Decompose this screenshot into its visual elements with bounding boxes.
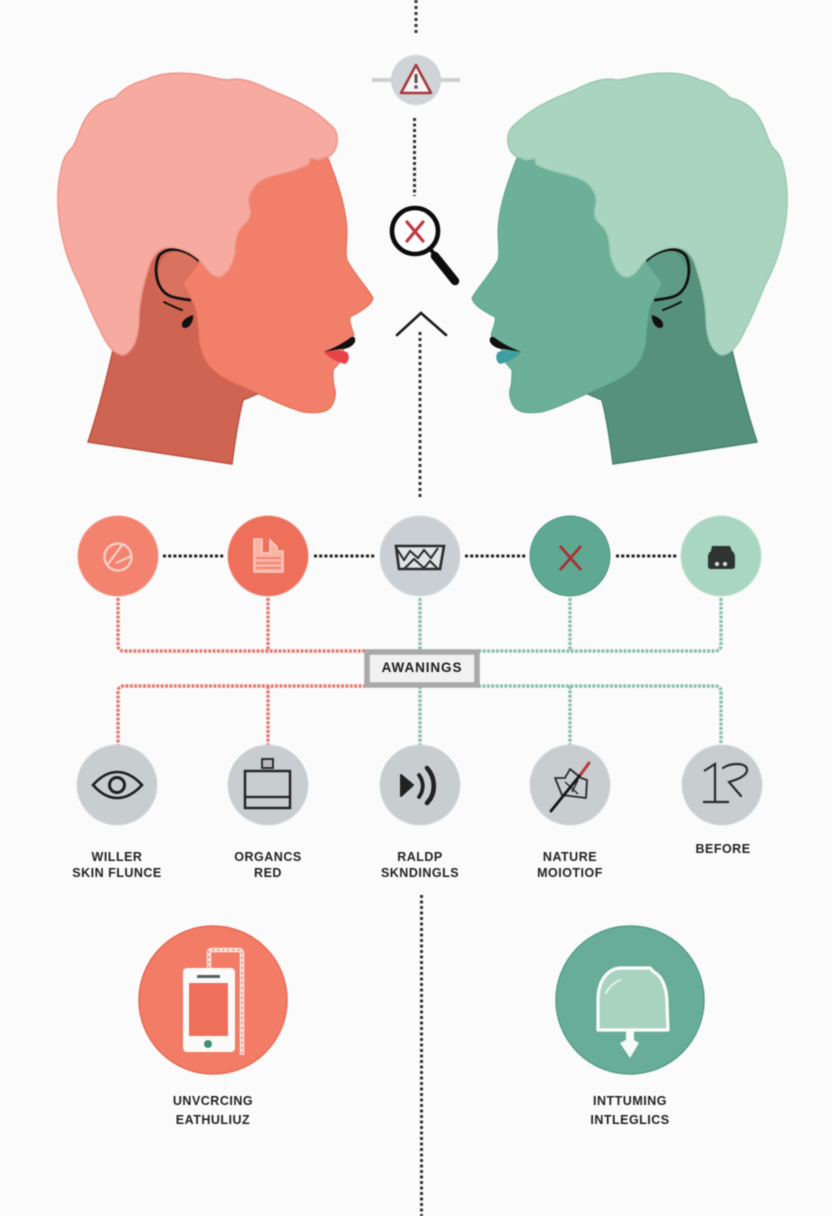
- bottom left label: UNVCRCING: [173, 1094, 253, 1108]
- label: second: ORGANCS: [234, 850, 302, 864]
- label: second: RED: [254, 866, 282, 880]
- bottom left label: EATHULIUZ: [176, 1113, 250, 1127]
- label: fourth: NATURE: [543, 850, 597, 864]
- icon labels: [72, 842, 751, 880]
- bottom row icons: [77, 745, 762, 825]
- central dotted line: lower: [418, 332, 422, 498]
- left neck: [88, 244, 262, 464]
- central label box: [367, 652, 477, 685]
- label: first: WILLER: [92, 850, 142, 864]
- left head: coral profile: [58, 73, 373, 464]
- icon circle: grey landscape: [380, 516, 460, 596]
- icon circle: glyph mark: [682, 745, 762, 825]
- bottom right label: INTTUMING: [593, 1094, 667, 1108]
- icon circle: eye: [77, 745, 157, 825]
- icon: magnifier with red cross: [392, 208, 455, 281]
- label: fifth: BEFORE: [695, 842, 751, 856]
- bottom right icon: capsule: [556, 926, 704, 1074]
- top row icons: [78, 516, 761, 596]
- central dotted line: top: [414, 0, 418, 33]
- label: fourth: MOIOTIOF: [537, 866, 603, 880]
- central dotted line: upper: [413, 118, 416, 196]
- right neck: [583, 244, 757, 464]
- icon circle: box: [228, 745, 308, 825]
- coral dotted connectors: [118, 598, 366, 746]
- label: first: SKIN FLUNCE: [72, 866, 162, 880]
- central label box: AWANINGS: [382, 660, 462, 675]
- left face: [183, 155, 373, 413]
- label: third: SKNDINGLS: [381, 866, 459, 880]
- icon circle: crossed leaf: [530, 745, 610, 825]
- icon: chevron up: [397, 313, 446, 335]
- bottom left icon: phone: [139, 926, 287, 1074]
- icon circle: green cross: [530, 516, 610, 596]
- right hair: [508, 73, 787, 355]
- right head: green profile: [472, 73, 787, 464]
- connectors between top icons: [163, 554, 677, 558]
- left hair: [58, 73, 337, 355]
- icon circle: coral chart: [78, 516, 158, 596]
- label: third: RALDP: [397, 850, 443, 864]
- right lips: [490, 337, 522, 364]
- warning badge: [372, 55, 460, 105]
- left ear: [156, 250, 201, 328]
- right face: [472, 155, 662, 413]
- right ear: [644, 250, 689, 328]
- icon circle: sound: [380, 745, 460, 825]
- icon circle: coral document: [228, 516, 308, 596]
- left lips: [323, 337, 355, 364]
- icon circle: light green device: [681, 516, 761, 596]
- bottom right label: INTLEGLICS: [590, 1113, 670, 1127]
- bottom vertical dotted divider: [420, 895, 423, 1216]
- green dotted connectors: [420, 598, 721, 746]
